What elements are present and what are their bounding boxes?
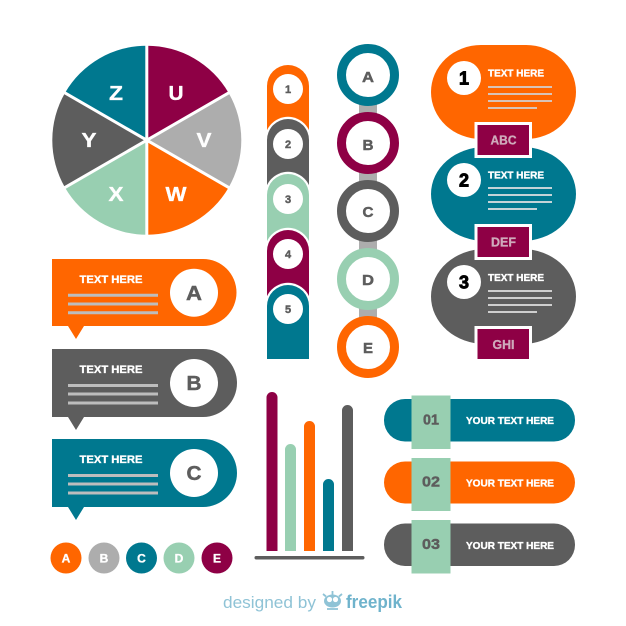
ring D [342,252,394,306]
speech bubble C: C [186,463,202,485]
pill row 02: YOUR TEXT HERE [466,478,554,490]
speech bubble A [52,259,236,339]
circle B: B [100,552,109,566]
ring chain [342,48,394,374]
tab 4: 4 [285,249,292,261]
circle C [126,542,157,574]
wedge V [147,93,241,187]
tab 5: 5 [285,304,291,316]
tab 1: 1 [285,84,291,96]
tab 4 [265,228,311,306]
pill row 02 [384,458,575,511]
pill row 01: YOUR TEXT HERE [466,416,554,427]
ring A [342,48,394,102]
pill row 01: 01 [423,412,439,428]
circle D [164,542,194,574]
wedge X [65,140,147,235]
wedge U: U [168,83,184,105]
circle D: D [175,552,184,566]
small lettered circles [50,542,232,574]
blob card 1: ABC [490,132,517,148]
speech bubble A: A [186,283,202,305]
blob card 1 [431,45,576,156]
circle A [50,542,82,574]
wedge Z [65,46,147,140]
blob card 2: TEXT HERE [488,170,544,182]
pill row 02: 02 [422,474,440,490]
wedge X: X [108,184,124,206]
ring E: E [363,340,373,357]
blob card 1: TEXT HERE [488,68,544,80]
tab 5 [265,283,311,359]
tab 2 [265,117,311,195]
speech bubble C: TEXT HERE [80,454,142,466]
wedge W: W [166,184,187,206]
bar chart [254,392,364,560]
freepik credit: freepik [346,592,403,612]
wedge W [147,140,229,235]
freepik credit [223,591,403,612]
circle C: C [137,552,146,566]
circle B [88,542,120,574]
tab 3: 3 [285,194,291,206]
blob card 2: DEF [491,234,516,250]
circle E [202,542,232,574]
wedge V: V [196,130,212,152]
speech bubble B [52,349,237,430]
speech bubble B: B [186,373,202,395]
pill row 03: 03 [422,536,440,553]
pill row 01 [384,396,575,449]
ring B [342,116,394,170]
wedge Y: Y [82,130,97,152]
blob card 3 [431,249,576,360]
pill row 03: YOUR TEXT HERE [466,541,554,552]
blob card 2: 2 [459,170,469,190]
numbered tab column [265,65,311,359]
blob card 3: 3 [459,272,469,292]
ring E [342,320,394,374]
speech bubble C [52,439,237,520]
tab 2: 2 [285,139,291,151]
ring D: D [362,272,374,289]
icon: freepik mascot [323,591,342,609]
speech bubble B: TEXT HERE [80,364,142,376]
blob card 2 [431,147,576,258]
circle E: E [213,552,221,566]
speech bubble A: TEXT HERE [80,274,142,286]
blob card 1: 1 [459,68,469,88]
blob card 3: TEXT HERE [488,273,544,284]
tab 1 [267,65,309,140]
blob card 3: GHI [492,337,514,352]
wedge Z: Z [109,83,123,105]
wedge Y [52,93,147,187]
circle A: A [62,552,71,566]
tab 3 [265,172,311,251]
freepik credit: designed by [223,593,317,612]
pill row 03 [384,520,575,574]
pie chart [52,42,241,238]
ring B: B [362,137,374,154]
ring C: C [362,204,374,221]
ring A: A [362,69,374,86]
wedge U [147,46,229,140]
ring C [342,184,394,238]
